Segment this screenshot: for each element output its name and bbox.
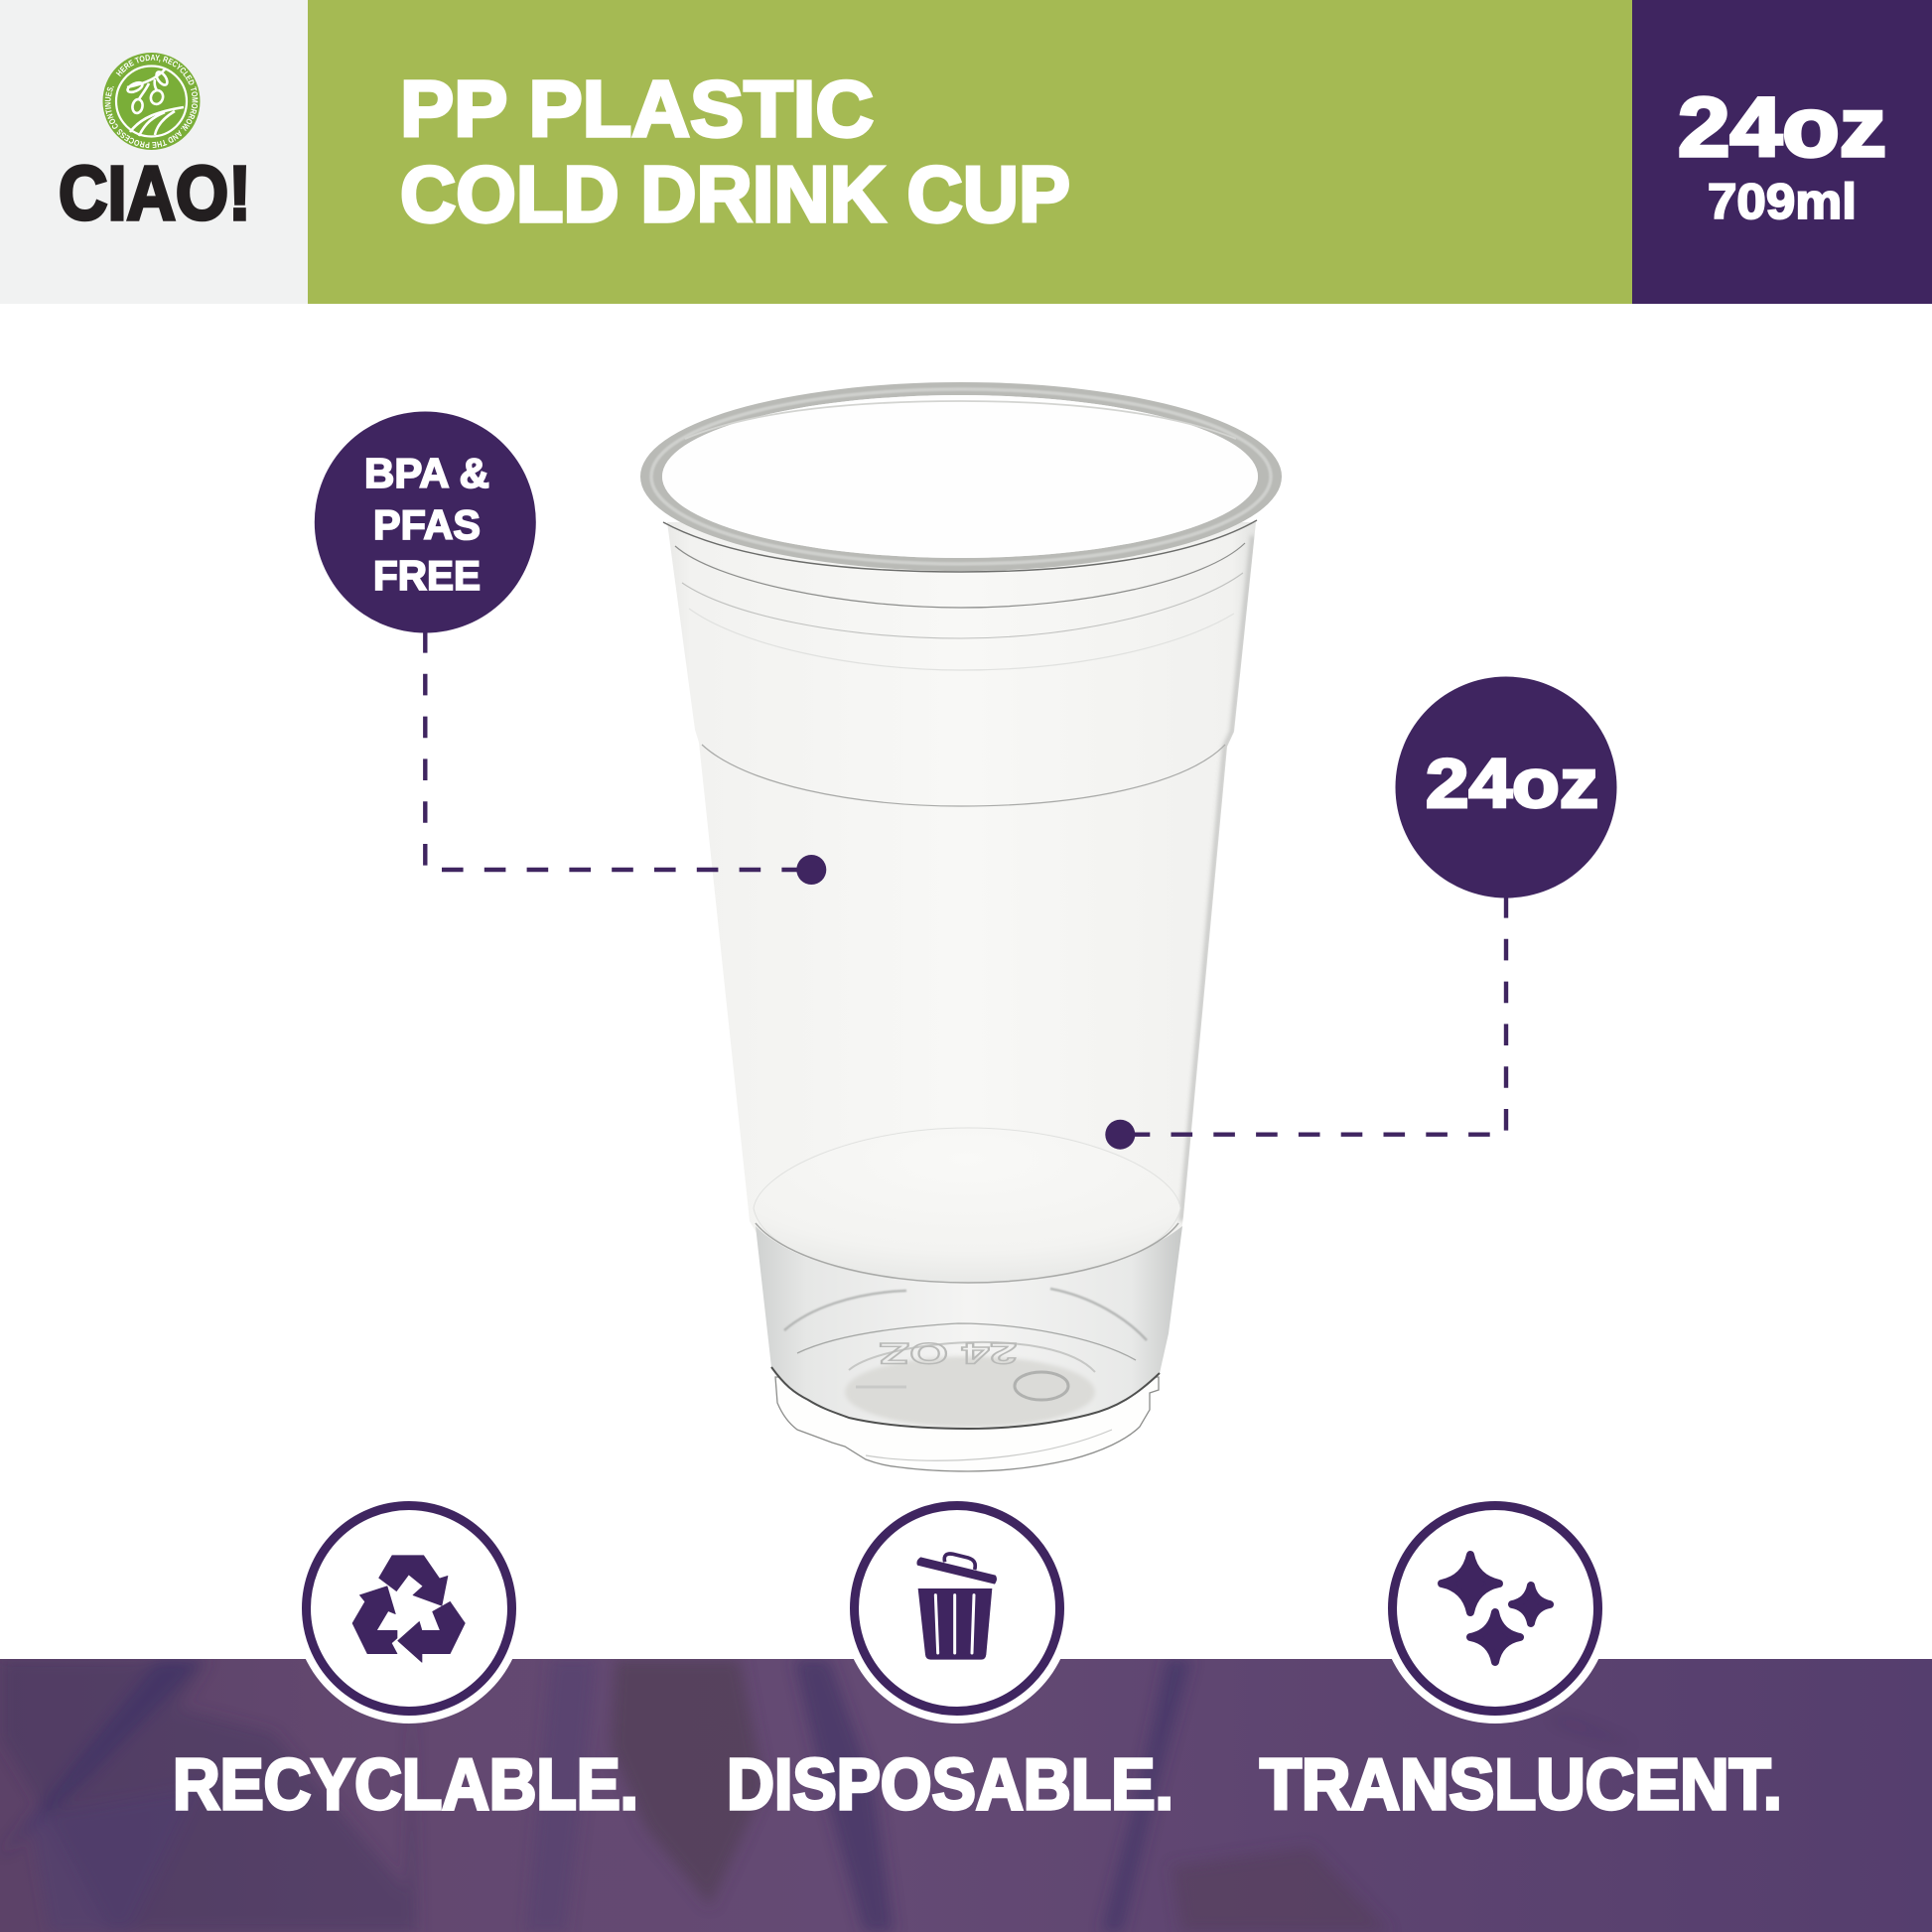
size ml: 709ml xyxy=(1708,174,1857,229)
embossed recycling mark xyxy=(1015,1372,1068,1400)
cup rim xyxy=(640,382,1282,572)
capacity dot xyxy=(1105,1120,1135,1150)
cup photo xyxy=(640,382,1282,1471)
capacity badge text: 24oz xyxy=(1426,745,1598,822)
title: PP PLASTIC xyxy=(400,65,874,153)
logo badge: HERE TODAY, RECYCLED TOMORROW. AND THE PROCESS CONTINUES. xyxy=(105,55,199,149)
capacity badge xyxy=(1396,677,1616,897)
label: translucent: TRANSLUCENT. xyxy=(1260,1745,1782,1825)
callout: BPA and PFAS free xyxy=(315,411,826,885)
capacity leader xyxy=(1132,897,1506,1135)
icon: trash bin xyxy=(842,1493,1072,1724)
embossed base text: 24 OZ xyxy=(880,1336,1017,1369)
bottom band with leaf background xyxy=(0,1658,1932,1932)
cup rings xyxy=(675,543,1245,1372)
cup foot flange xyxy=(775,1377,1159,1471)
header: title panel xyxy=(308,0,1632,304)
callout badge text: PFAS xyxy=(373,501,481,548)
callout dot xyxy=(796,855,826,885)
header: logo panel xyxy=(0,0,308,304)
callout: capacity xyxy=(1105,677,1616,1150)
label: recyclable: RECYCLABLE. xyxy=(173,1745,638,1825)
cup lower wall xyxy=(756,1226,1182,1429)
size oz: 24oz xyxy=(1678,80,1886,174)
callout leader xyxy=(425,631,799,870)
cup lower dome xyxy=(754,1128,1180,1283)
title xyxy=(400,65,1070,238)
header: size panel xyxy=(1632,0,1932,304)
callout badge text: BPA & xyxy=(364,450,489,496)
callout badge xyxy=(315,411,536,633)
cup body xyxy=(667,522,1256,1429)
cup base disc xyxy=(845,1356,1095,1428)
cup right edge shade xyxy=(1181,536,1253,1221)
title: COLD DRINK CUP xyxy=(400,150,1070,238)
label: disposable: DISPOSABLE. xyxy=(727,1745,1173,1825)
icon: sparkles xyxy=(1380,1493,1610,1724)
callout badge text: FREE xyxy=(373,552,481,599)
callout badge text xyxy=(364,450,489,599)
icon: recycle xyxy=(294,1493,524,1724)
logo wordmark: CIAO! xyxy=(59,151,251,236)
